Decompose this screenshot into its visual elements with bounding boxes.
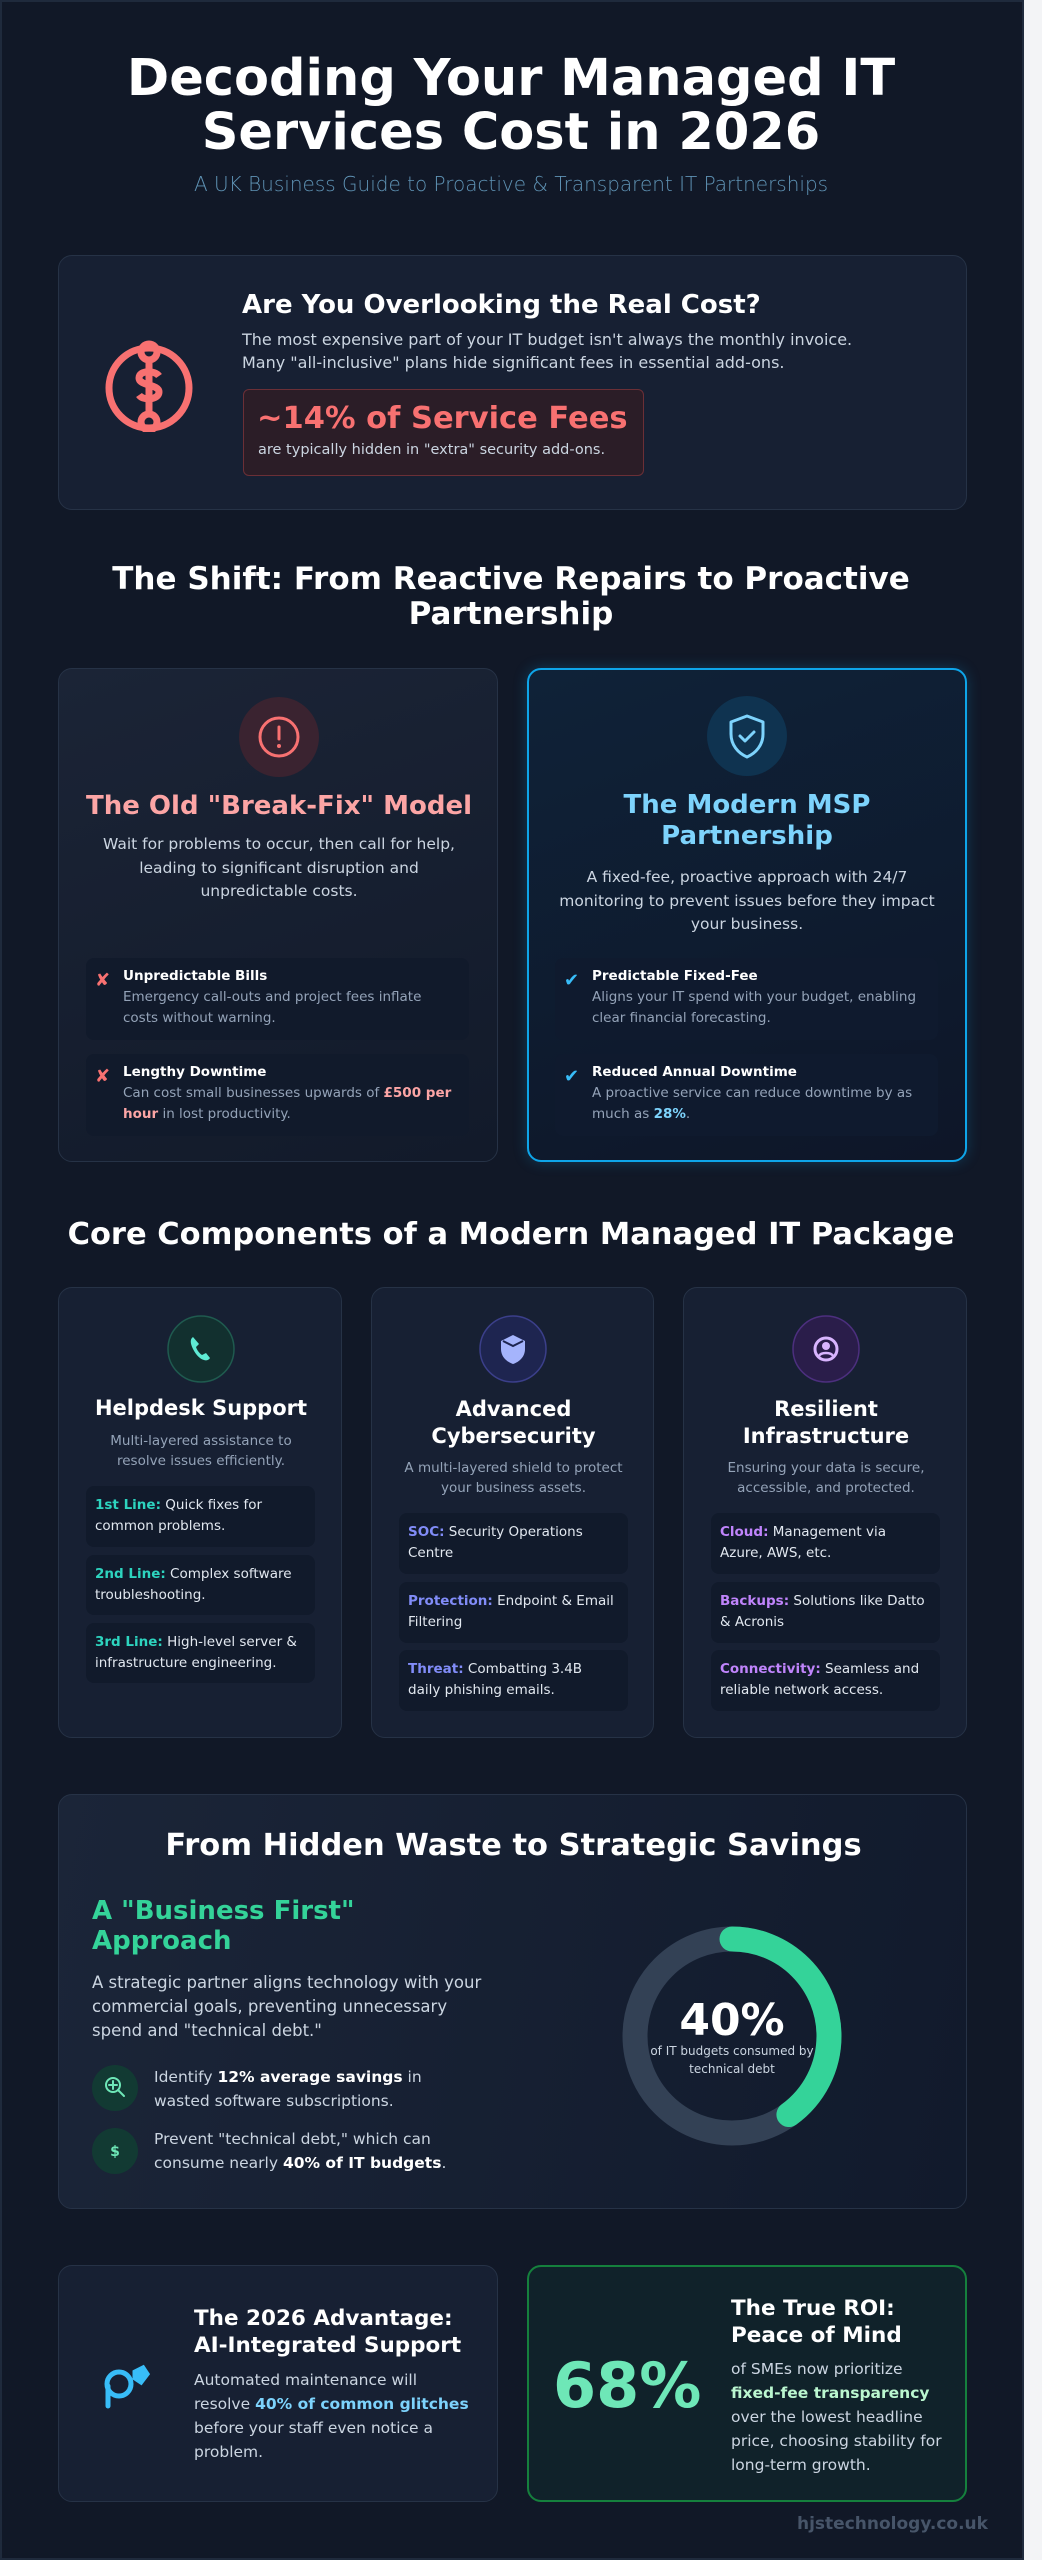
heading: Cybersecurity: [431, 1424, 596, 1448]
item: unpredictable bills: ✘: [95, 970, 110, 991]
icon: phone: [167, 1315, 235, 1383]
icon: dollar: $: [110, 2144, 120, 2160]
item: fixed fee: ✔: [564, 970, 579, 991]
item: lengthy downtime: Lengthy Downtime: [123, 1064, 266, 1080]
icon: magnifier: [92, 2065, 138, 2111]
item: reduced downtime: Reduced Annual Downtime: [592, 1064, 797, 1080]
heading: The True ROI:: [731, 2296, 895, 2321]
item: lengthy downtime: ✘: [95, 1066, 110, 1087]
item: cloud: Cloud: Management via: [720, 1524, 886, 1540]
item: 1st line: 1st Line: Quick fixes for common problems.: [95, 1497, 262, 1534]
heading: Helpdesk Support: [95, 1396, 307, 1420]
item: 1st line: [86, 1486, 315, 1547]
item: unpredictable bills: Emergency call-outs and project fees inflate costs without warning.: [123, 989, 421, 1026]
heading: Advanced: [456, 1397, 571, 1421]
panel: cybersecurity: [371, 1287, 654, 1738]
heading: Peace of Mind: [731, 2323, 902, 2348]
item: backups: Backups: Solutions like Datto & Acronis: [720, 1593, 925, 1630]
item: fixed fee: Aligns your IT spend with your budget, enabling clear financial forecasting.: [592, 989, 916, 1026]
item: unpredictable bills: Unpredictable Bills: [123, 968, 267, 984]
item: reduced downtime: ✔: [564, 1066, 579, 1087]
item: 2nd line: [86, 1555, 315, 1615]
heading: [624, 790, 870, 851]
text: [194, 2371, 469, 2461]
item: fixed fee: Predictable Fixed-Fee: [592, 968, 758, 984]
subtitle: A UK Business Guide to Proactive & Transparent IT Partnerships: [194, 172, 828, 196]
heading: Are You Overlooking the Real Cost?: [242, 290, 761, 320]
chart: donut 40%: of IT budgets consumed by: [650, 2044, 814, 2058]
callout: 14%: [243, 389, 644, 476]
text: A multi-layered shield to protect your business assets.: [404, 1460, 623, 1496]
text: problem.: [194, 2443, 263, 2461]
title: Services Cost in 2026: [202, 103, 820, 162]
chart: donut 40%: technical debt: [689, 2062, 775, 2076]
title: [127, 49, 895, 162]
text: Automated maintenance will: [194, 2371, 417, 2389]
item: lengthy downtime: Can cost small businesses upwards of £500 per hour in lost productivity.: [123, 1085, 451, 1122]
text: resolve 40% of common glitches: [194, 2395, 469, 2413]
text: A fixed-fee, proactive approach with 24/7 monitoring to prevent issues before they impact your business.: [559, 868, 935, 933]
heading: AI-Integrated Support: [194, 2333, 461, 2358]
item: threat: Threat: Combatting 3.4B: [408, 1661, 582, 1677]
item: SOC: SOC: Security Operations Centre: [408, 1524, 583, 1561]
panel: ROI: [527, 2265, 967, 2502]
bullet: savings: Identify 12% average savings in wasted software subscriptions.: [154, 2068, 422, 2110]
heading: [431, 1397, 596, 1448]
icon: alert: [239, 697, 319, 777]
icon: AI: [104, 2364, 150, 2408]
item: 3rd line: 3rd Line: High-level server & infrastructure engineering.: [95, 1634, 297, 1671]
heading: From Hidden Waste to Strategic Savings: [165, 1828, 862, 1863]
chart: donut 40%: [622, 1926, 842, 2146]
item: fixed fee: [555, 958, 938, 1040]
callout: 14%: ~14% of Service Fees: [257, 401, 628, 436]
text: The most expensive part of your IT budget isn't always the monthly invoice.: [242, 330, 852, 349]
icon: network: [792, 1315, 860, 1383]
icon: dollar chain: [106, 340, 192, 432]
panel: infrastructure: [683, 1287, 967, 1738]
item: protection: [399, 1582, 628, 1643]
text: Wait for problems to occur, then call for help, leading to significant disruption and unpredictable costs.: [103, 835, 455, 900]
item: threat: [399, 1650, 628, 1711]
text: before your staff even notice a: [194, 2419, 433, 2437]
item: backups: [711, 1582, 940, 1643]
item: 2nd line: 2nd Line: Complex software troubleshooting.: [95, 1566, 292, 1603]
panel: hidden cost: [58, 255, 967, 510]
callout: 14%: are typically hidden in "extra" security add-ons.: [258, 442, 605, 458]
icon: dollar: [92, 2128, 138, 2174]
heading: [731, 2296, 902, 2348]
heading: The Modern MSP: [624, 790, 870, 820]
icon: shield user: [479, 1315, 547, 1383]
subheading: A "Business First": [92, 1896, 355, 1926]
heading: the shift: The Shift: From Reactive Repairs to Proactive Partnership: [112, 561, 910, 632]
panel: helpdesk: [58, 1287, 342, 1738]
item: threat: daily phishing emails.: [408, 1682, 555, 1698]
item: reduced downtime: [555, 1054, 938, 1136]
panel: AI advantage: [58, 2265, 498, 2502]
stat: 68%: 68%: [553, 2349, 701, 2422]
text: Ensuring your data is secure, accessible, and protected.: [728, 1460, 924, 1496]
text: Multi-layered assistance to resolve issues efficiently.: [110, 1433, 292, 1469]
item: connectivity: Connectivity: Seamless and reliable network access.: [720, 1661, 919, 1698]
heading: Resilient: [774, 1397, 878, 1421]
text: [242, 330, 852, 372]
icon: shield: [707, 696, 787, 776]
item: cloud: [711, 1513, 940, 1574]
item: connectivity: [711, 1650, 940, 1711]
item: cloud: Azure, AWS, etc.: [720, 1545, 831, 1561]
subheading: [92, 1896, 355, 1956]
panel: break-fix: [58, 668, 498, 1162]
title: Decoding Your Managed IT: [127, 49, 895, 108]
item: SOC: [399, 1513, 628, 1574]
heading: The Old "Break-Fix" Model: [86, 791, 472, 821]
subheading: Approach: [92, 1926, 232, 1956]
item: lengthy downtime: [86, 1054, 469, 1136]
panel: modern MSP: [527, 668, 967, 1162]
bullet: technical debt: Prevent "technical debt," which can consume nearly 40% of IT budgets.: [154, 2130, 446, 2172]
text: of SMEs now prioritize fixed-fee transparency over the lowest headline price, choosing stability for long-term growth.: [731, 2360, 942, 2474]
item: 3rd line: [86, 1623, 315, 1683]
panel: savings: [58, 1794, 967, 2209]
heading: The 2026 Advantage:: [194, 2306, 453, 2331]
heading: Partnership: [661, 821, 833, 851]
item: unpredictable bills: [86, 958, 469, 1040]
heading: Infrastructure: [743, 1424, 909, 1448]
item: reduced downtime: A proactive service can reduce downtime by as much as 28%.: [592, 1085, 912, 1122]
chart: donut 40%: 40%: [679, 1995, 785, 2046]
heading: core components: Core Components of a Modern Managed IT Package: [68, 1217, 954, 1252]
heading: [194, 2306, 461, 2358]
item: protection: Protection: Endpoint & Email Filtering: [408, 1593, 614, 1630]
heading: [743, 1397, 909, 1448]
text: Many "all-inclusive" plans hide significant fees in essential add-ons.: [242, 353, 784, 372]
footer: hjstechnology.co.uk: [797, 2514, 988, 2534]
text: A strategic partner aligns technology with your commercial goals, preventing unnecessary spend and "technical debt.": [92, 1973, 481, 2040]
